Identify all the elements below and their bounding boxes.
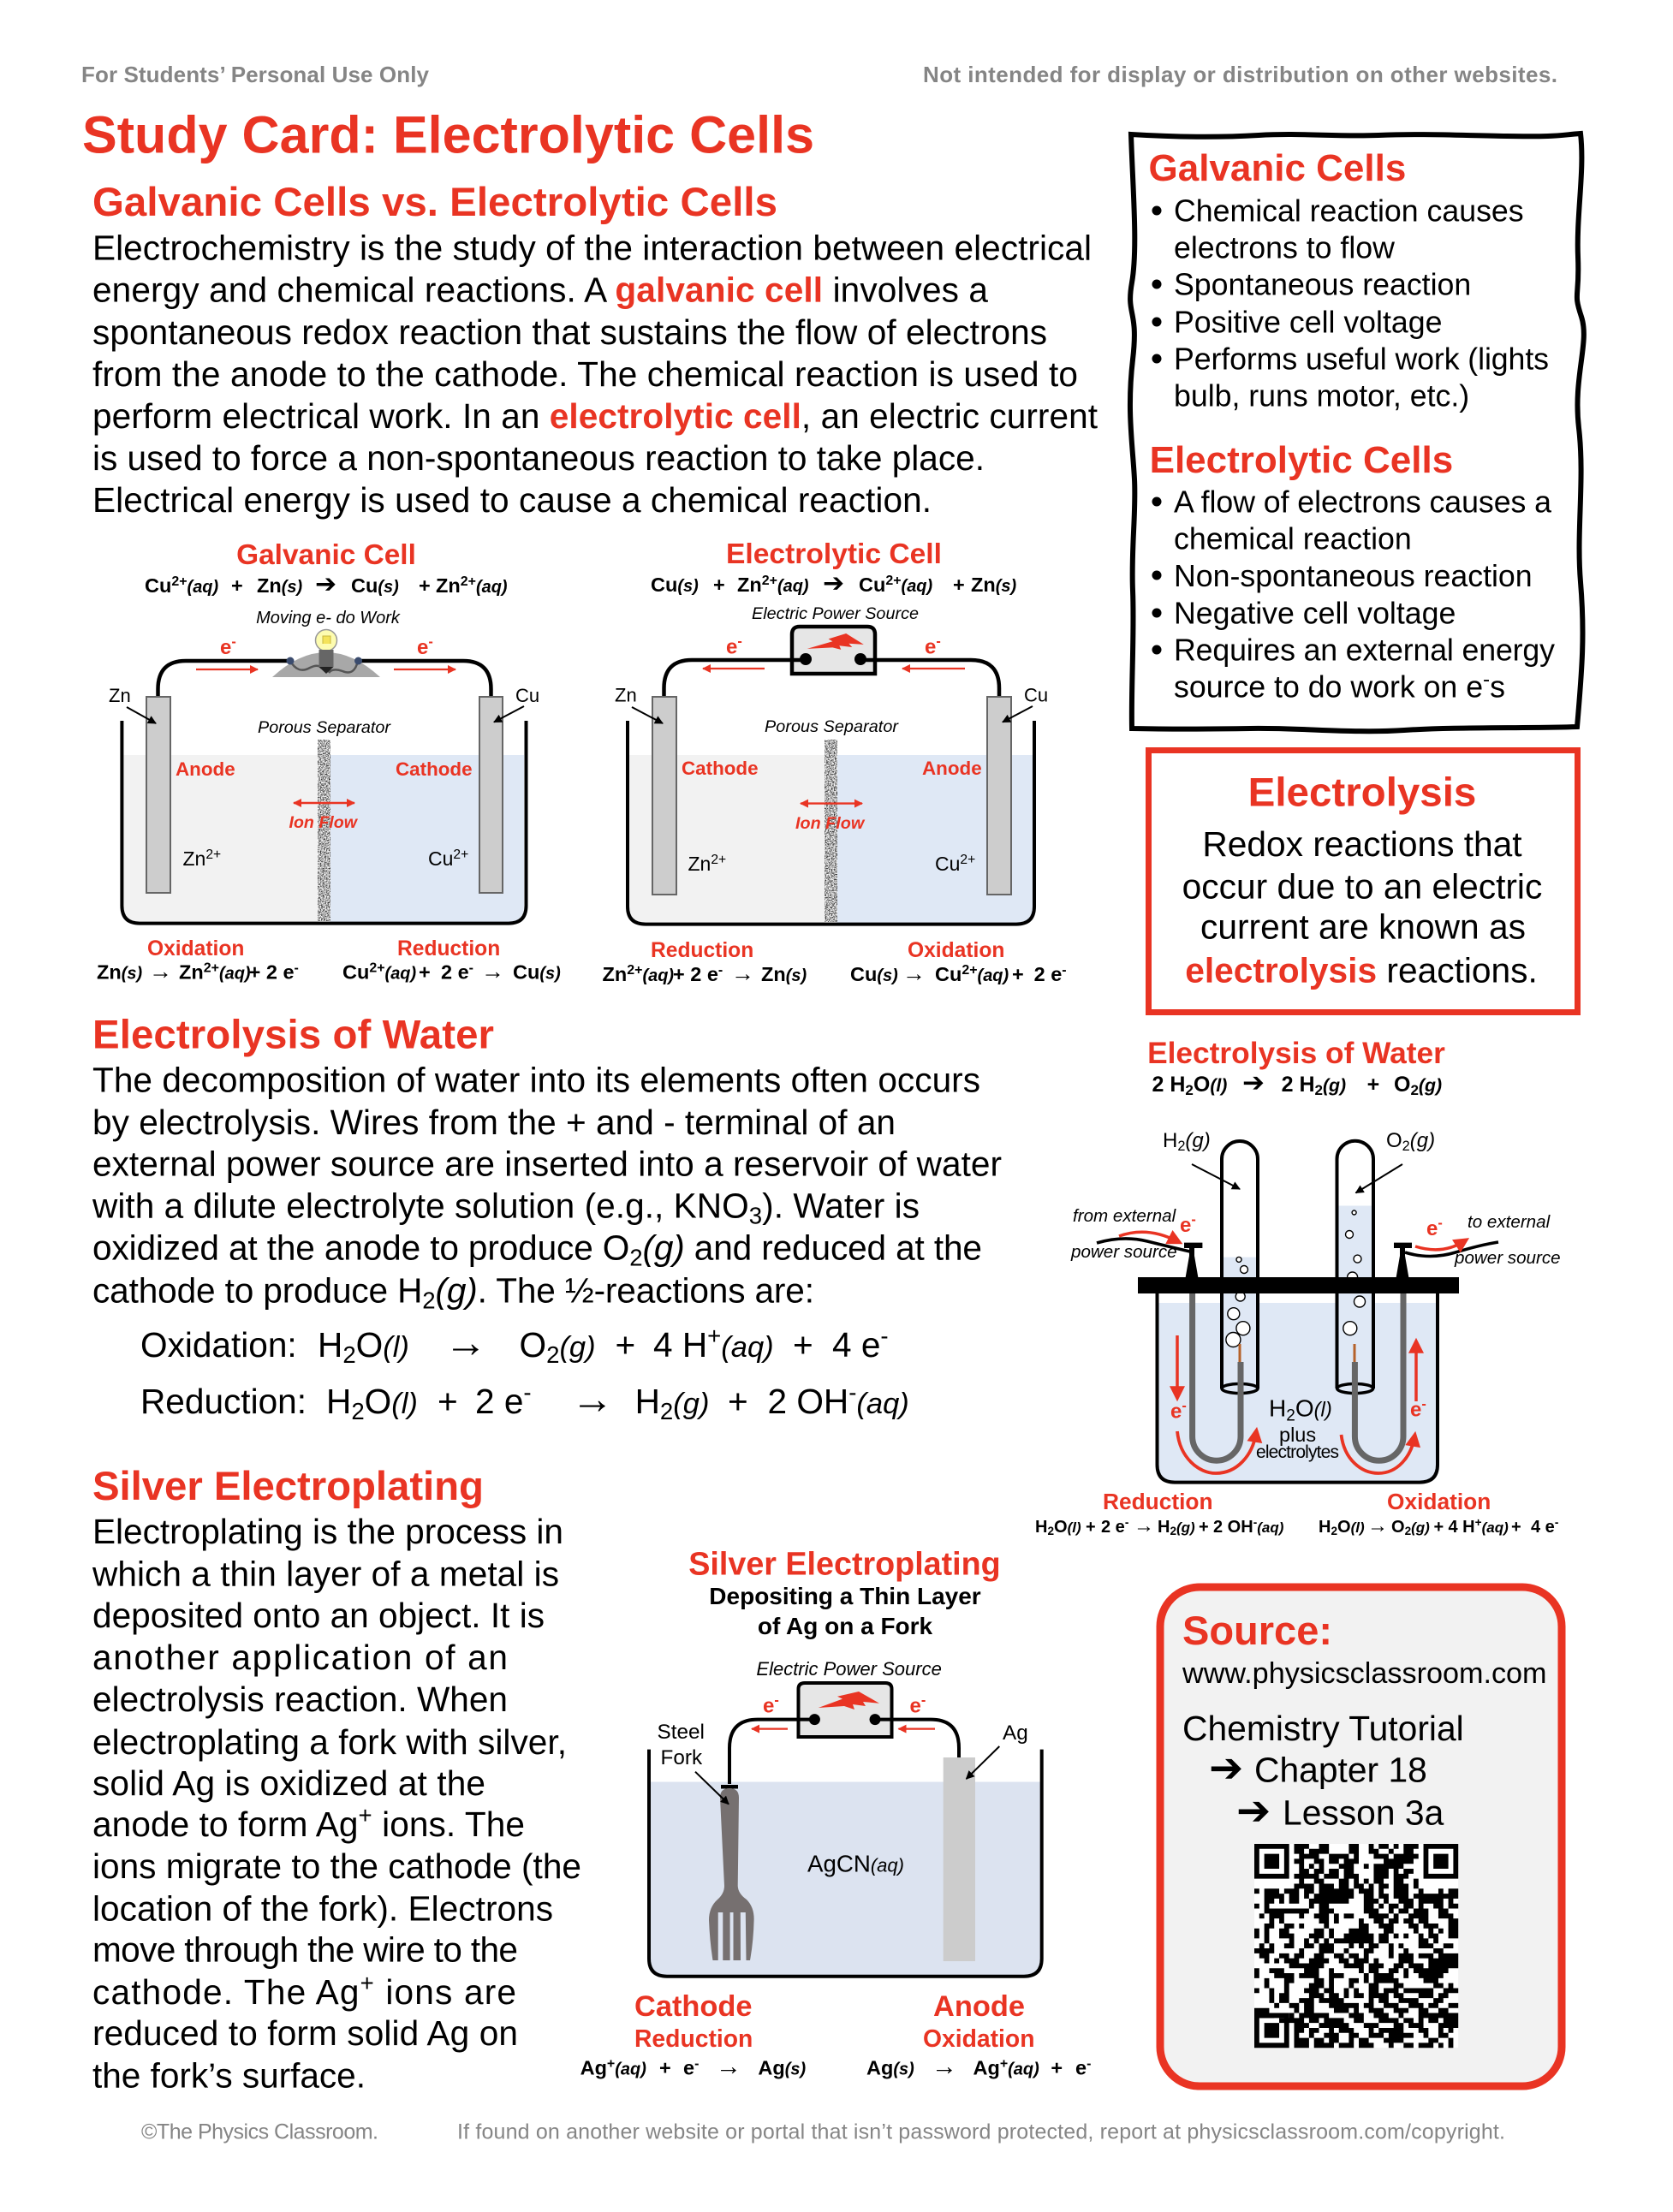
oxidation half-reaction: O2(g)	[519, 1325, 596, 1368]
steel fork label: Fork	[661, 1746, 703, 1769]
half reactions: →	[902, 960, 926, 986]
liquid left	[629, 755, 825, 923]
ion labels: Cu2+	[428, 847, 468, 870]
oxidation half-reaction: +	[615, 1325, 635, 1365]
paragraph	[92, 1512, 581, 2096]
reduction oxidation labels: Oxidation	[923, 2025, 1034, 2052]
half reactions: 2 e-	[1034, 962, 1067, 985]
half reactions: +	[1199, 1518, 1209, 1537]
power source label: Electric Power Source	[752, 604, 919, 623]
water equation: O2(g)	[1394, 1073, 1442, 1098]
oxidation half-reaction: 4 H+(aq)	[653, 1322, 774, 1365]
half reactions: e-	[1075, 2056, 1091, 2079]
paragraph: spontaneous redox reaction that sustains the flow of electrons	[92, 312, 1047, 352]
galvanic equation: ➔	[315, 569, 336, 599]
water plus electrolytes label: plus	[1279, 1424, 1316, 1446]
electrode labels: Zn	[615, 685, 637, 706]
half reactions: Cu2+(aq)	[935, 962, 1009, 985]
oxidation reduction labels: Reduction	[397, 937, 500, 960]
red border	[1149, 750, 1577, 1012]
electroplating title: Silver Electroplating	[688, 1545, 1001, 1581]
water equation: ➔	[1242, 1067, 1265, 1098]
liquid right	[836, 755, 1033, 923]
galvanic bullets: Chemical reaction causes	[1174, 193, 1524, 228]
paragraph: move through the wire to the	[92, 1930, 518, 1969]
half reactions: + 2 e-	[673, 962, 723, 985]
reduction half-reaction: 2 e-	[475, 1378, 532, 1421]
electron labels: e-	[763, 1693, 779, 1718]
galvanic equation: Zn2+(aq)	[436, 574, 508, 597]
reduction half-reaction: Reduction:	[140, 1382, 307, 1421]
electrolytic bullets	[1152, 485, 1555, 704]
half reactions: +	[1051, 2057, 1063, 2079]
galvanic equation: +	[419, 574, 431, 597]
external red arrows	[1119, 1232, 1464, 1250]
header note: personal use: For Students’ Personal Use Only	[81, 62, 430, 87]
half reactions: Cu2+(aq)	[342, 960, 416, 983]
oxidation half-reaction: +	[793, 1325, 813, 1365]
galvanic bullets	[1152, 193, 1549, 413]
curved red arrows	[1177, 1431, 1414, 1473]
icon: steel fork	[709, 1788, 754, 1960]
copper electrode	[479, 697, 503, 893]
water plus electrolytes label: electrolytes	[1256, 1442, 1339, 1462]
zinc electrode	[652, 697, 676, 895]
beaker	[122, 721, 526, 924]
definition text: Redox reactions that	[1202, 824, 1522, 864]
half reactions: Zn(s)	[97, 960, 142, 983]
half reactions: +	[419, 960, 431, 983]
porous separator label: Porous Separator	[765, 717, 899, 736]
oxygen label: O2(g)	[1386, 1129, 1435, 1154]
reduction half-reaction: +	[438, 1382, 458, 1421]
electrolytic bullets: Negative cell voltage	[1174, 596, 1456, 630]
half reactions: →	[716, 2053, 741, 2081]
website: www.physicsclassroom.com	[1182, 1657, 1547, 1690]
electrolytic bullets: Non-spontaneous reaction	[1174, 559, 1533, 593]
external wires	[1097, 1239, 1498, 1257]
water equation: 2 H2(g)	[1282, 1073, 1346, 1098]
silver solution	[651, 1782, 1040, 1975]
paragraph: electroplating a fork with silver,	[92, 1722, 567, 1762]
section: silver electroplating text	[92, 1464, 581, 2096]
galvanic equation: +	[231, 574, 243, 597]
half reactions: →	[149, 959, 172, 984]
electrolytic equation: Zn2+(aq)	[737, 574, 809, 596]
paragraph	[92, 228, 1098, 520]
anode cathode labels: Cathode	[396, 758, 473, 780]
half reactions: 4 H+(aq)	[1449, 1515, 1509, 1537]
paragraph: another application of an	[92, 1638, 508, 1677]
paragraph: Electroplating is the process in	[92, 1512, 563, 1551]
paragraph: Electrochemistry is the study of the interaction between electrical	[92, 228, 1092, 267]
reduction half-reaction: 2 OH-(aq)	[767, 1378, 909, 1421]
electron labels: e-	[1180, 1212, 1196, 1237]
half reactions: 2 e-	[1101, 1515, 1128, 1537]
tutorial path: Chemistry Tutorial	[1182, 1709, 1464, 1748]
water equation: 2 H2O(l)	[1152, 1073, 1227, 1098]
electrolytic bullets: Requires an external energy	[1174, 633, 1555, 668]
cathode anode labels: Cathode	[682, 758, 759, 779]
electrolytic equation: Cu(s)	[651, 574, 699, 596]
electrode pointers	[632, 706, 1033, 723]
reduction half-reaction: H2(g)	[635, 1382, 709, 1424]
half reactions: Ag+(aq)	[973, 2056, 1039, 2079]
ion labels: Cu2+	[935, 853, 975, 875]
tutorial path	[1182, 1709, 1464, 1835]
half reactions: +	[1086, 1518, 1096, 1537]
section: electrolysis of water text	[92, 1012, 1002, 1424]
reduction oxidation labels: Oxidation	[1387, 1489, 1491, 1514]
copper electrode	[987, 697, 1011, 895]
half reactions: →	[1134, 1514, 1154, 1537]
definition text	[1182, 824, 1542, 990]
electrolytic equation: +	[713, 574, 725, 596]
half reactions: O2(g)	[1391, 1518, 1430, 1537]
liquid left	[123, 755, 319, 922]
water diagram title: Electrolysis of Water	[1147, 1037, 1445, 1070]
diagram: electrolytic cell	[603, 538, 1067, 986]
footer copyright: ©The Physics Classroom.	[141, 2120, 378, 2144]
half reactions: H2O(l)	[1319, 1518, 1365, 1537]
tutorial path: ➔	[1236, 1787, 1271, 1835]
electrolytic bullets: source to do work on e-s	[1174, 668, 1505, 704]
electron labels: e-	[925, 634, 941, 659]
oxidation half-reaction: H2O(l)	[318, 1325, 409, 1368]
insulated U wires	[1193, 1288, 1403, 1460]
vertical red arrows	[1177, 1335, 1416, 1401]
electron arrows	[752, 1727, 935, 1730]
electron labels: e-	[417, 634, 433, 659]
reduction oxidation labels: Reduction	[634, 2025, 753, 2052]
paragraph: location of the fork). Electrons	[92, 1888, 553, 1928]
ion labels: Zn2+	[183, 847, 221, 870]
paragraph: energy and chemical reactions. A galvanic cell involves a	[92, 271, 988, 310]
diagram: silver electroplating	[580, 1545, 1091, 2081]
galvanic cells heading: Galvanic Cells	[1149, 147, 1406, 189]
half reactions: +	[1433, 1518, 1444, 1537]
diagram: electrolysis of water	[1035, 1037, 1561, 1537]
reservoir liquid	[1158, 1303, 1436, 1481]
paragraph: electrolysis reaction. When	[92, 1680, 508, 1719]
electroplating subtitle: of Ag on a Fork	[758, 1613, 933, 1639]
zinc electrode	[146, 697, 170, 893]
reduction oxidation labels: Reduction	[1103, 1489, 1213, 1514]
electrode labels: Zn	[109, 685, 131, 706]
galvanic equation: Cu(s)	[351, 574, 399, 597]
electrolytic equation: Zn(s)	[971, 574, 1016, 596]
half reactions: Cu(s)	[513, 960, 561, 983]
galvanic bullets: Spontaneous reaction	[1174, 267, 1471, 301]
paragraph: ions migrate to the cathode (the	[92, 1846, 581, 1886]
galvanic equation: Zn(s)	[257, 574, 302, 597]
anode cathode labels: Anode	[176, 758, 235, 780]
cathode anode labels: Anode	[933, 1990, 1025, 2023]
heading: Galvanic Cells vs. Electrolytic Cells	[92, 180, 777, 225]
header note: distribution: Not intended for display or distribution on other websites.	[923, 62, 1557, 87]
half reactions: →	[481, 959, 504, 984]
support plate	[1138, 1277, 1459, 1293]
half reactions: +	[1012, 963, 1024, 985]
from external label: power source	[1070, 1242, 1177, 1262]
electroplating subtitle: Depositing a Thin Layer	[709, 1583, 981, 1609]
water plus electrolytes label: H2O(l)	[1269, 1395, 1332, 1424]
half reactions: +	[659, 2057, 671, 2079]
half reactions: 4 e-	[1531, 1515, 1558, 1537]
gas pointers	[1192, 1164, 1402, 1193]
tutorial path: Lesson 3a	[1283, 1793, 1444, 1832]
footer notice: If found on another website or portal that isn’t password protected, report at physicsclassroom.com/copyright.	[457, 2120, 1505, 2144]
oxygen bubbles	[1343, 1210, 1365, 1335]
half reactions: +	[1511, 1518, 1521, 1537]
section: galvanic vs electrolytic text	[92, 180, 1098, 520]
moving electrons label: Moving e- do Work	[256, 609, 401, 627]
silver label: Ag	[1003, 1721, 1028, 1745]
water plus electrolytes label	[1256, 1395, 1339, 1462]
solution label: AgCN(aq)	[807, 1851, 904, 1877]
galvanic bullets: Performs useful work (lights	[1174, 342, 1549, 377]
half reactions: →	[932, 2053, 957, 2081]
electrode pointers	[127, 706, 524, 723]
diagram: galvanic cell	[97, 539, 561, 984]
wire	[664, 660, 999, 697]
paragraph: perform electrical work. In an electrolytic cell, an electric current	[92, 396, 1098, 436]
power source box	[790, 627, 877, 674]
half reactions: Zn2+(aq)	[179, 960, 251, 983]
title: Study Card: Electrolytic Cells	[82, 106, 814, 164]
electrode labels: Cu	[1024, 685, 1048, 706]
electrolytic title: Electrolytic Cell	[726, 538, 942, 570]
copper wire tips	[1240, 1344, 1354, 1363]
right test tube	[1337, 1141, 1373, 1394]
half reactions: Zn2+(aq)	[603, 962, 674, 985]
paragraph: from the anode to the cathode. The chemical reaction is used to	[92, 354, 1078, 394]
card background	[1160, 1587, 1562, 2086]
tutorial path: Chapter 18	[1254, 1751, 1427, 1790]
electrolytic equation: ➔	[823, 568, 844, 598]
paragraph: deposited onto an object. It is	[92, 1596, 545, 1635]
reduction half-reaction: →	[571, 1375, 614, 1423]
paragraph: is used to force a non-spontaneous reaction to take place.	[92, 438, 985, 478]
electrolytic bullets: chemical reaction	[1174, 522, 1412, 556]
galvanic bullets: Positive cell voltage	[1174, 305, 1442, 339]
ion flow arrow	[294, 802, 354, 804]
reservoir	[1158, 1288, 1438, 1483]
paragraph: Electrical energy is used to cause a chemical reaction.	[92, 480, 932, 520]
reduction half-reaction: +	[728, 1382, 748, 1421]
wire	[729, 1720, 959, 1784]
half reactions: →	[1367, 1514, 1388, 1537]
terminals	[1184, 1243, 1412, 1278]
porous separator label: Porous Separator	[258, 718, 391, 737]
ion labels: Zn2+	[688, 853, 726, 875]
electron labels: e-	[1426, 1216, 1443, 1240]
half reactions: Ag(s)	[758, 2057, 806, 2079]
beaker	[628, 721, 1034, 925]
ion flow arrow	[801, 802, 862, 805]
silver anode bar	[944, 1757, 975, 1961]
liquid right	[330, 755, 524, 922]
electron labels: e-	[220, 634, 236, 659]
definition text: occur due to an electric	[1182, 866, 1542, 906]
paragraph: the fork’s surface.	[92, 2056, 366, 2096]
wavy border	[1130, 134, 1584, 731]
paragraph: The decomposition of water into its elements often occurs	[92, 1060, 980, 1099]
steel fork label: Steel	[658, 1721, 705, 1744]
wire	[158, 661, 491, 697]
paragraph: oxidized at the anode to produce O2(g) and reduced at the	[92, 1228, 982, 1270]
cathode anode labels: Cathode	[634, 1990, 753, 2023]
icon: light bulb	[272, 630, 380, 677]
electron labels: e-	[1410, 1397, 1426, 1421]
panel: electrolysis definition	[1149, 750, 1577, 1012]
paragraph: anode to form Ag+ ions. The	[92, 1801, 525, 1844]
ion flow label: Ion Flow	[289, 813, 359, 832]
electrolytic equation: +	[953, 574, 965, 596]
paragraph: solid Ag is oxidized at the	[92, 1763, 485, 1803]
galvanic title: Galvanic Cell	[236, 539, 416, 571]
ion flow label: Ion Flow	[795, 814, 866, 833]
porous separator	[825, 740, 837, 922]
electron arrows	[196, 669, 455, 670]
hydrogen bubbles	[1226, 1257, 1250, 1347]
power source box	[797, 1683, 893, 1737]
cathode anode labels: Anode	[922, 758, 982, 779]
reduction oxidation labels: Reduction	[651, 939, 753, 962]
electrolysis heading: Electrolysis	[1248, 770, 1476, 815]
tutorial path: ➔	[1209, 1745, 1243, 1793]
electron labels: e-	[1170, 1399, 1187, 1423]
galvanic equation: Cu2+(aq)	[145, 574, 218, 597]
water equation: +	[1367, 1073, 1379, 1097]
paragraph	[92, 1060, 1002, 1313]
oxidation half-reaction: →	[444, 1318, 487, 1366]
beaker	[649, 1750, 1042, 1977]
fork cap	[721, 1785, 738, 1789]
half reactions: Ag+(aq)	[580, 2056, 646, 2079]
definition text: electrolysis reactions.	[1185, 950, 1538, 990]
half reactions: + 2 e-	[249, 960, 299, 983]
paragraph: cathode. The Ag+ ions are	[92, 1969, 516, 2012]
electron labels: e-	[726, 634, 742, 659]
electrolytic bullets: A flow of electrons causes a	[1174, 485, 1551, 519]
electron labels: e-	[909, 1693, 926, 1718]
galvanic bullets: bulb, runs motor, etc.)	[1174, 378, 1469, 413]
reduction half-reaction: H2O(l)	[326, 1382, 418, 1424]
QR code	[1254, 1844, 1458, 2048]
half reactions: Ag(s)	[866, 2057, 914, 2079]
half reactions: Cu(s)	[850, 963, 898, 985]
paragraph: by electrolysis. Wires from the + and - terminal of an	[92, 1103, 896, 1142]
to external label: to external	[1468, 1212, 1551, 1232]
from external label: from external	[1073, 1206, 1177, 1226]
left test tube	[1222, 1141, 1258, 1394]
oxidation half-reaction: Oxidation:	[140, 1325, 297, 1365]
electron arrows	[703, 668, 965, 669]
panel: source card	[1160, 1587, 1562, 2086]
paragraph: which a thin layer of a metal is	[92, 1555, 559, 1594]
half reactions: →	[731, 960, 754, 986]
hydrogen label: H2(g)	[1163, 1129, 1211, 1154]
porous separator	[318, 740, 330, 921]
reduction oxidation labels: Oxidation	[908, 939, 1004, 962]
electrolytic equation: Cu2+(aq)	[859, 574, 932, 596]
half reactions: H2O(l)	[1035, 1518, 1081, 1537]
pointers	[695, 1746, 999, 1805]
galvanic bullets: electrons to flow	[1174, 231, 1395, 265]
source heading: Source:	[1182, 1608, 1332, 1653]
paragraph: with a dilute electrolyte solution (e.g., KNO3). Water is	[92, 1186, 920, 1228]
definition text: current are known as	[1200, 907, 1526, 947]
electrolytic cells heading: Electrolytic Cells	[1150, 439, 1453, 481]
heading: Electrolysis of Water	[92, 1012, 494, 1058]
power source label: Electric Power Source	[756, 1658, 942, 1680]
heading: Silver Electroplating	[92, 1464, 484, 1509]
paragraph: cathode to produce H2(g). The ½-reactions are:	[92, 1270, 814, 1313]
paragraph: external power source are inserted into a reservoir of water	[92, 1144, 1002, 1183]
electrode labels: Cu	[515, 685, 539, 706]
half reactions: 2 e-	[441, 960, 473, 983]
oxidation half-reaction: 4 e-	[832, 1322, 889, 1365]
to external label: power source	[1454, 1248, 1561, 1268]
paragraph: reduced to form solid Ag on	[92, 2013, 518, 2053]
half reactions: H2(g)	[1158, 1518, 1195, 1537]
half reactions: e-	[683, 2056, 699, 2079]
panel: galvanic vs electrolytic summary	[1130, 134, 1584, 731]
half reactions: Zn(s)	[761, 963, 807, 985]
oxidation reduction labels: Oxidation	[147, 937, 244, 960]
half reactions: 2 OH-(aq)	[1213, 1515, 1283, 1537]
